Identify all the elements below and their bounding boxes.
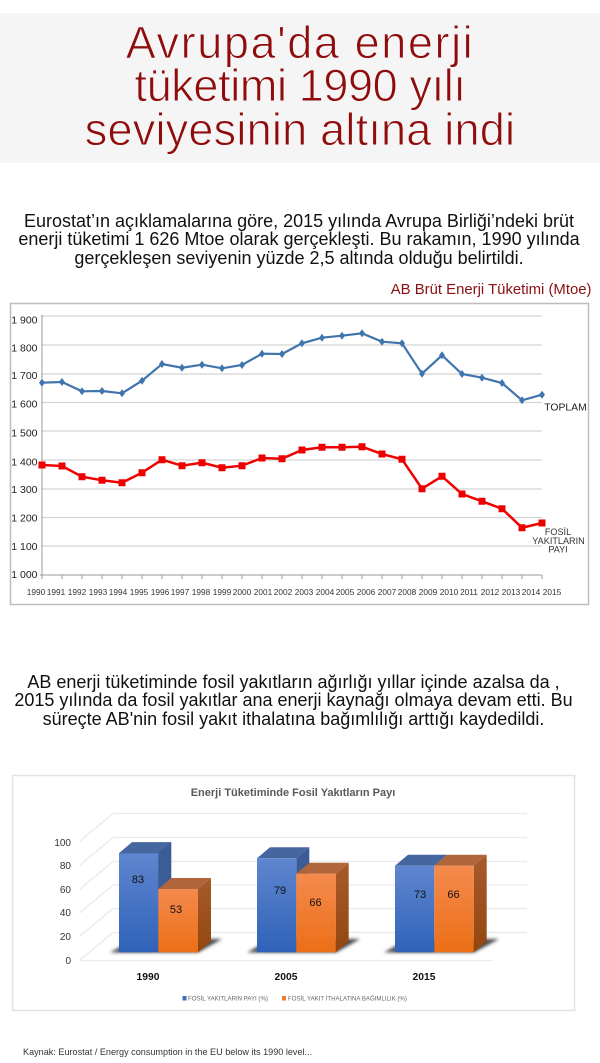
x axis labels: 2005 [336,587,355,597]
x axis labels: 2010 [440,587,459,597]
label: total: TOPLAM [544,402,587,414]
x axis labels: 1992 [68,587,87,597]
label: fossil share: YAKITLARIN [532,536,585,546]
title banner: tüketimi 1990 yılı [134,60,466,111]
legend [182,996,407,1002]
x axis labels: 1997 [171,587,190,597]
intro text block [18,211,580,268]
y axis labels: 60 [60,885,71,896]
y axis labels: 20 [60,932,71,943]
legend: FOSİL YAKITLARIN PAYI (%) [188,996,268,1002]
bars: 2005 [247,847,360,952]
x axis labels: 2013 [502,587,521,597]
bars: 2005: 66 [309,897,322,909]
bars: 2005: 79 [274,885,286,897]
source note: Kaynak: Eurostat / Energy consumption in the EU below its 1990 level... [23,1047,312,1057]
bars: 2015: 66 [447,889,460,901]
category labels: 2015 [413,972,436,983]
label: fossil share: PAYI [548,545,568,555]
title banner: seviyesinin altına indi [85,104,515,155]
category labels: 2005 [275,972,298,983]
title banner: Avrupa'da enerji [126,17,474,68]
second text block: süreçte AB'nin fosil yakıt ithalatına bağımlılığı arttığı kaydedildi. [43,709,544,729]
category labels: 1990 [137,972,160,983]
x axis labels [27,587,562,597]
y axis labels: 1 900 [11,315,38,327]
x axis labels: 1991 [47,587,66,597]
y axis labels: 1 700 [11,370,38,382]
bar chart title: Enerji Tüketiminde Fosil Yakıtların Payı [191,787,395,799]
second text block: AB enerji tüketiminde fosil yakıtların ağırlığı yıllar içinde azalsa da , [27,672,560,692]
y axis labels: 80 [60,861,71,872]
legend: FOSİL YAKIT İTHALATINA BAĞIMLILIK (%) [288,996,407,1002]
y axis labels: 100 [54,838,71,849]
x axis labels: 2009 [419,587,438,597]
x axis labels: 1993 [89,587,108,597]
line chart: EU gross energy consumption [10,302,590,606]
y axis labels: 1 600 [11,399,38,411]
title banner [0,13,600,163]
second text block [14,672,573,729]
x axis labels: 2002 [274,587,293,597]
y axis labels: 1 300 [11,484,38,496]
x axis labels: 2003 [295,587,314,597]
3D grid [80,814,527,961]
bars: 2015: 73 [414,889,426,901]
x axis labels: 2011 [460,587,478,597]
y axis labels [11,315,38,581]
label: fossil share [532,527,585,555]
bars: 1990 [110,842,222,952]
category labels [137,972,436,983]
y axis labels: 40 [60,908,71,919]
x axis labels: 2007 [378,587,397,597]
y axis labels: 1 100 [11,541,38,553]
x axis labels: 1998 [192,587,211,597]
series: total (blue line) [39,329,545,404]
x axis labels: 1990 [27,587,46,597]
y axis labels: 1 200 [11,512,38,524]
bars: 2015 [384,855,499,952]
x axis labels: 1995 [130,587,149,597]
bars: 1990: 83 [132,874,144,886]
bars: 1990: 53 [170,904,182,916]
x axis labels: 1996 [151,587,170,597]
y axis labels: 1 000 [11,569,38,581]
intro text block: Eurostat’ın açıklamalarına göre, 2015 yılında Avrupa Birliği’ndeki brüt [24,211,574,231]
series: fossil share (red line) [38,443,546,531]
x axis labels: 1999 [213,587,232,597]
x axis labels: 2015 [543,587,562,597]
y axis labels: 1 800 [11,342,38,354]
y axis labels: 1 500 [11,427,38,439]
x axis labels: 2001 [254,587,273,597]
x axis labels: 2008 [398,587,417,597]
x axis labels: 2000 [233,587,252,597]
x axis labels: 2012 [481,587,500,597]
intro text block: enerji tüketimi 1 626 Mtoe olarak gerçekleşti. Bu rakamın, 1990 yılında [18,229,580,249]
line chart heading: AB Brüt Enerji Tüketimi (Mtoe) [391,282,592,298]
y axis labels: 0 [65,956,71,967]
y axis labels: 1 400 [11,457,38,469]
second text block: 2015 yılında da fosil yakıtlar ana enerji kaynağı olmaya devam etti. Bu [14,690,573,710]
x axis labels: 1994 [109,587,128,597]
label: fossil share: FOSİL [545,527,571,537]
x axis labels: 2014 [522,587,541,597]
x axis labels: 2006 [357,587,376,597]
x axis labels: 2004 [316,587,335,597]
intro text block: gerçekleşen seviyenin yüzde 2,5 altında olduğu belirtildi. [74,248,524,268]
y axis labels [54,838,71,967]
